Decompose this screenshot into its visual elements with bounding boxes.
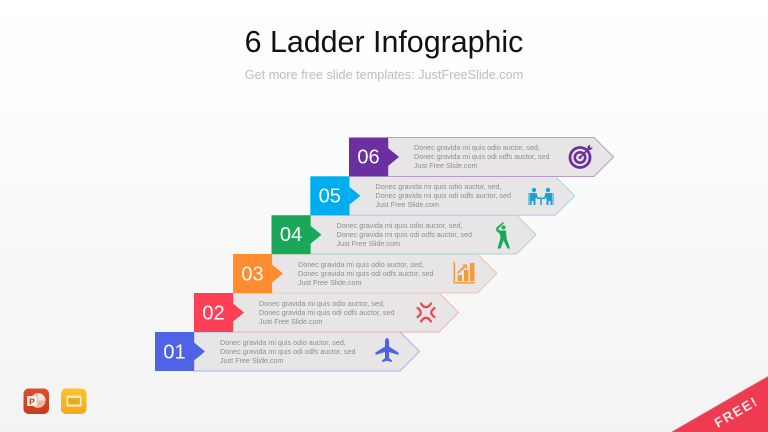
step 05 [310,176,575,215]
icon: PowerPoint [24,388,49,414]
step 04: Donec gravida mi quis odio auctor, sed, [336,221,462,230]
step 02: Donec gravida mi quis odio auctor, sed, [259,299,385,308]
step 05: 05 [319,185,341,207]
icon: bar chart [454,262,475,284]
step 03 [233,254,497,293]
step 06: 06 [357,146,380,168]
badge: free: FREE! [712,394,761,431]
step 06: Donec gravida mi quis odio auctor, sed, [414,143,540,152]
step 04: 04 [280,224,302,246]
step 02 [194,293,458,332]
step 03: Donec gravida mi quis odio auctor, sed, [298,260,424,269]
badge: free [671,376,768,432]
step 03: Donec gravida mi quis odi odfs auctor, sed [298,269,433,278]
icon: anger mark [418,304,434,322]
step 02: Just Free Slide.com [259,317,323,326]
step 01: Donec gravida mi quis odi odfs auctor, sed [220,347,355,356]
icon: PowerPoint: P [29,396,35,406]
step 06 [349,138,614,176]
step 05: Just Free Slide.com [376,200,439,209]
icon: batter figure [496,222,510,248]
icon: Google Slides [61,388,86,414]
step 05: Donec gravida mi quis odi odfs auctor, sed [376,191,511,200]
step 05: Donec gravida mi quis odio auctor, sed, [376,182,501,191]
step 04: Just Free Slide.com [336,239,400,248]
icon: airplane [376,338,398,362]
step 01 [155,332,420,371]
step 02: Donec gravida mi quis odi odfs auctor, sed [259,308,394,317]
step 04: Donec gravida mi quis odi odfs auctor, sed [336,230,472,239]
subtitle: Get more free slide templates: JustFreeSlide.com [245,68,523,82]
step 01: Donec gravida mi quis odio auctor, sed, [220,338,346,347]
step 03: Just Free Slide.com [298,278,362,287]
step 02: 02 [202,302,225,324]
title: 6 Ladder Infographic [245,25,523,59]
icon: meeting [528,188,554,205]
step 06: Just Free Slide.com [414,161,478,170]
step 01: Just Free Slide.com [220,356,284,365]
icon: target [570,144,593,168]
step 06: Donec gravida mi quis odi odfs auctor, sed [414,152,549,161]
step 03: 03 [241,264,264,286]
step 04 [272,215,536,254]
step 01: 01 [163,342,186,364]
